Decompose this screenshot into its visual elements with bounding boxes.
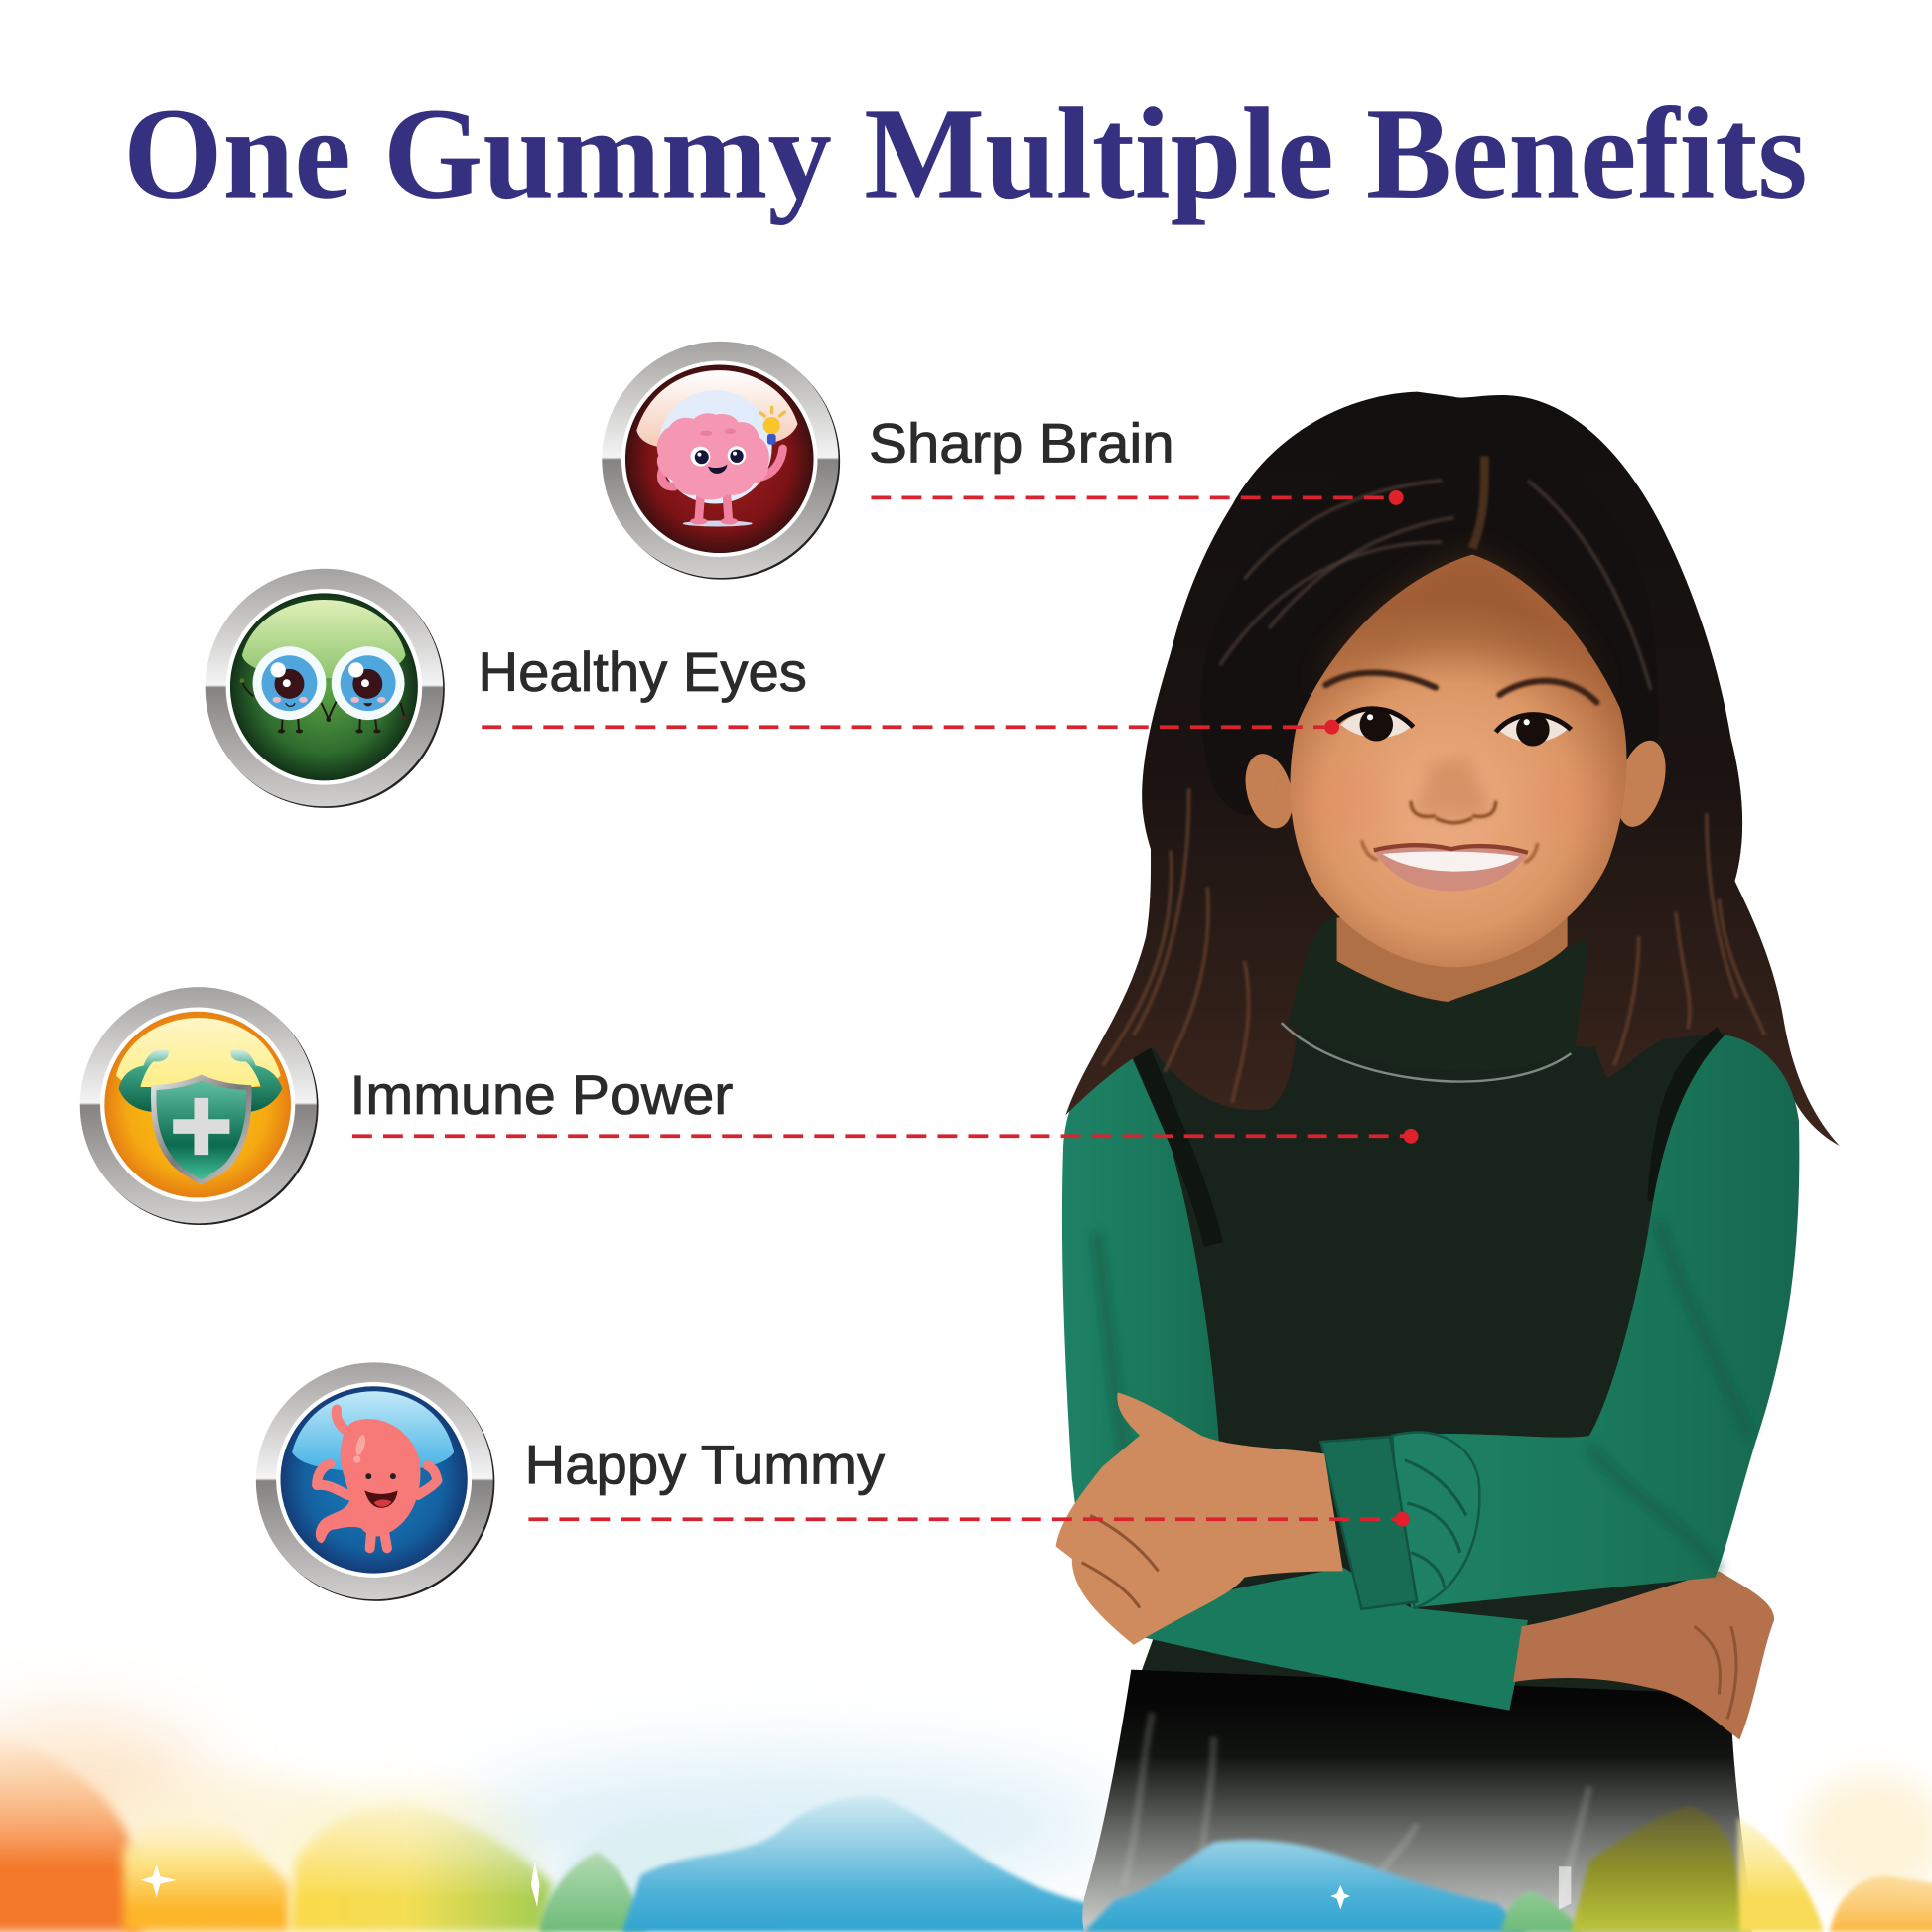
callout: Healthy Eyes: Healthy Eyes (479, 640, 807, 703)
right hand (1513, 1571, 1774, 1739)
eyes (1337, 708, 1571, 746)
ears (1238, 735, 1674, 834)
hair strands (1103, 788, 1764, 1103)
girl illustration (1056, 392, 1840, 1932)
upper right sleeve (1392, 1035, 1799, 1608)
left hand and forearm (1056, 1392, 1343, 1645)
skirt folds (1124, 1713, 1589, 1922)
skirt (1082, 1670, 1752, 1932)
callout: Healthy Eyes (479, 640, 1339, 735)
callout: Immune Power: Immune Power (349, 1063, 733, 1126)
collar seam (1282, 1023, 1571, 1082)
nose shadow (1417, 758, 1488, 820)
hair: left lock (1066, 690, 1307, 1115)
dress torso (1128, 1023, 1731, 1701)
face (1290, 554, 1626, 967)
callout: Happy Tummy: Happy Tummy (525, 1433, 885, 1495)
sleeve: girl's right upper arm (1062, 1047, 1247, 1528)
nose (1411, 801, 1496, 823)
icon: brain (602, 342, 840, 580)
callout: Sharp Brain: Sharp Brain (869, 411, 1174, 474)
forehead shadow (1318, 557, 1601, 696)
turtleneck (1288, 914, 1589, 1071)
cheek blush (1307, 768, 1601, 833)
hair: right lock (1587, 740, 1784, 1078)
sleeve fold shading (1097, 1220, 1749, 1571)
mouth (1361, 840, 1538, 891)
icon: happy tummy (256, 1362, 494, 1601)
sparkles (140, 1861, 1571, 1910)
callout: Happy Tummy (525, 1433, 1410, 1527)
callout: Sharp Brain (869, 411, 1404, 505)
neck (1337, 899, 1568, 1002)
icon: immune shield (80, 987, 319, 1225)
sleeve cuff (1320, 1437, 1417, 1609)
icon: eyes (206, 569, 445, 808)
hair sheen (1220, 456, 1651, 690)
hair: fringe (1201, 425, 1659, 815)
title: One Gummy Multiple Benefits (123, 82, 1808, 226)
hair: back (1142, 392, 1840, 1146)
sleeve puff (1392, 1433, 1479, 1608)
bottom watercolor wash behind skirt (0, 1719, 1932, 1932)
watercolor wash in front of skirt (1084, 1806, 1932, 1932)
lower forearm sleeve (1121, 1568, 1528, 1711)
finger lines (1082, 1516, 1736, 1719)
dress straps (1140, 1035, 1723, 1244)
callout: Immune Power (349, 1063, 1418, 1144)
eyebrows (1325, 673, 1596, 702)
sleeve gathers (1405, 1460, 1466, 1587)
